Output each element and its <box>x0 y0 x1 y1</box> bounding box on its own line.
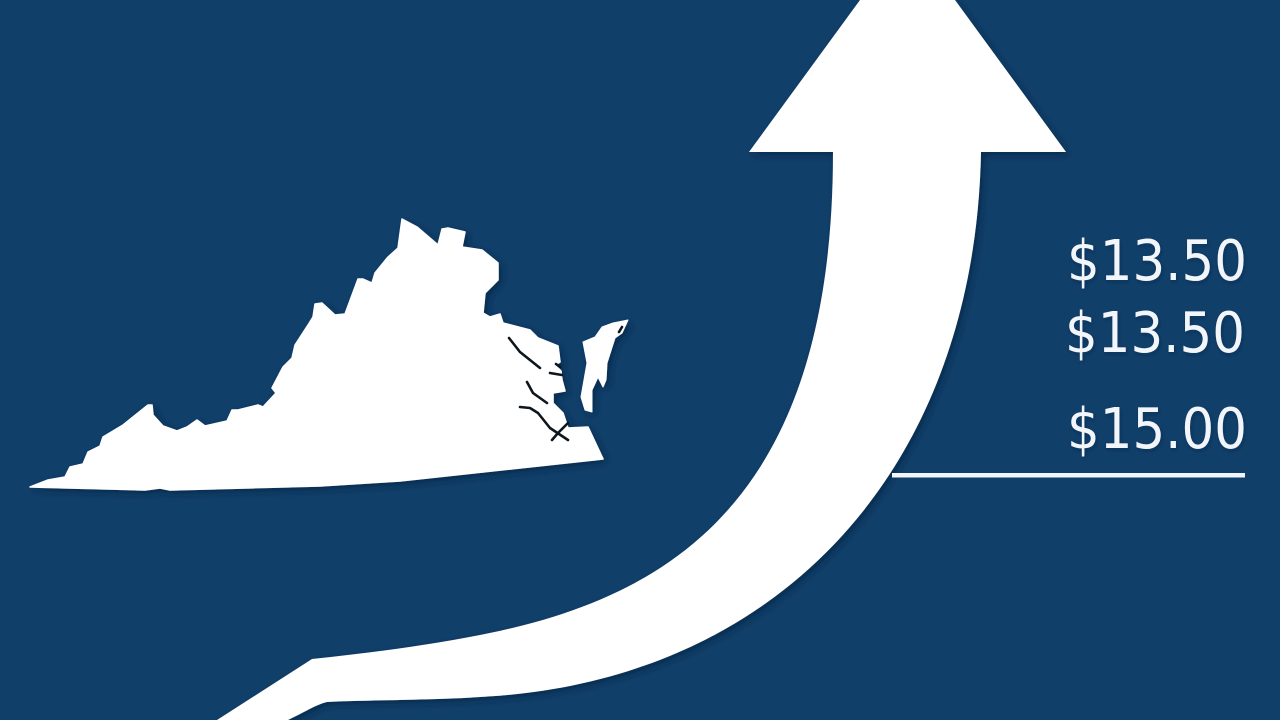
icon: rivers <box>509 327 622 440</box>
wage values <box>1065 229 1247 462</box>
arrow: rising wage arrow <box>217 0 1066 720</box>
wage value: first $13.50: $13.50 <box>1067 229 1247 294</box>
icon: Virginia state map <box>30 219 628 490</box>
wage value: $15.00: $15.00 <box>1067 397 1247 462</box>
wage value: second $13.50: $13.50 <box>1065 301 1245 366</box>
baseline rule under $15.00 <box>892 473 1245 478</box>
icon: eastern shore peninsula <box>581 320 628 412</box>
